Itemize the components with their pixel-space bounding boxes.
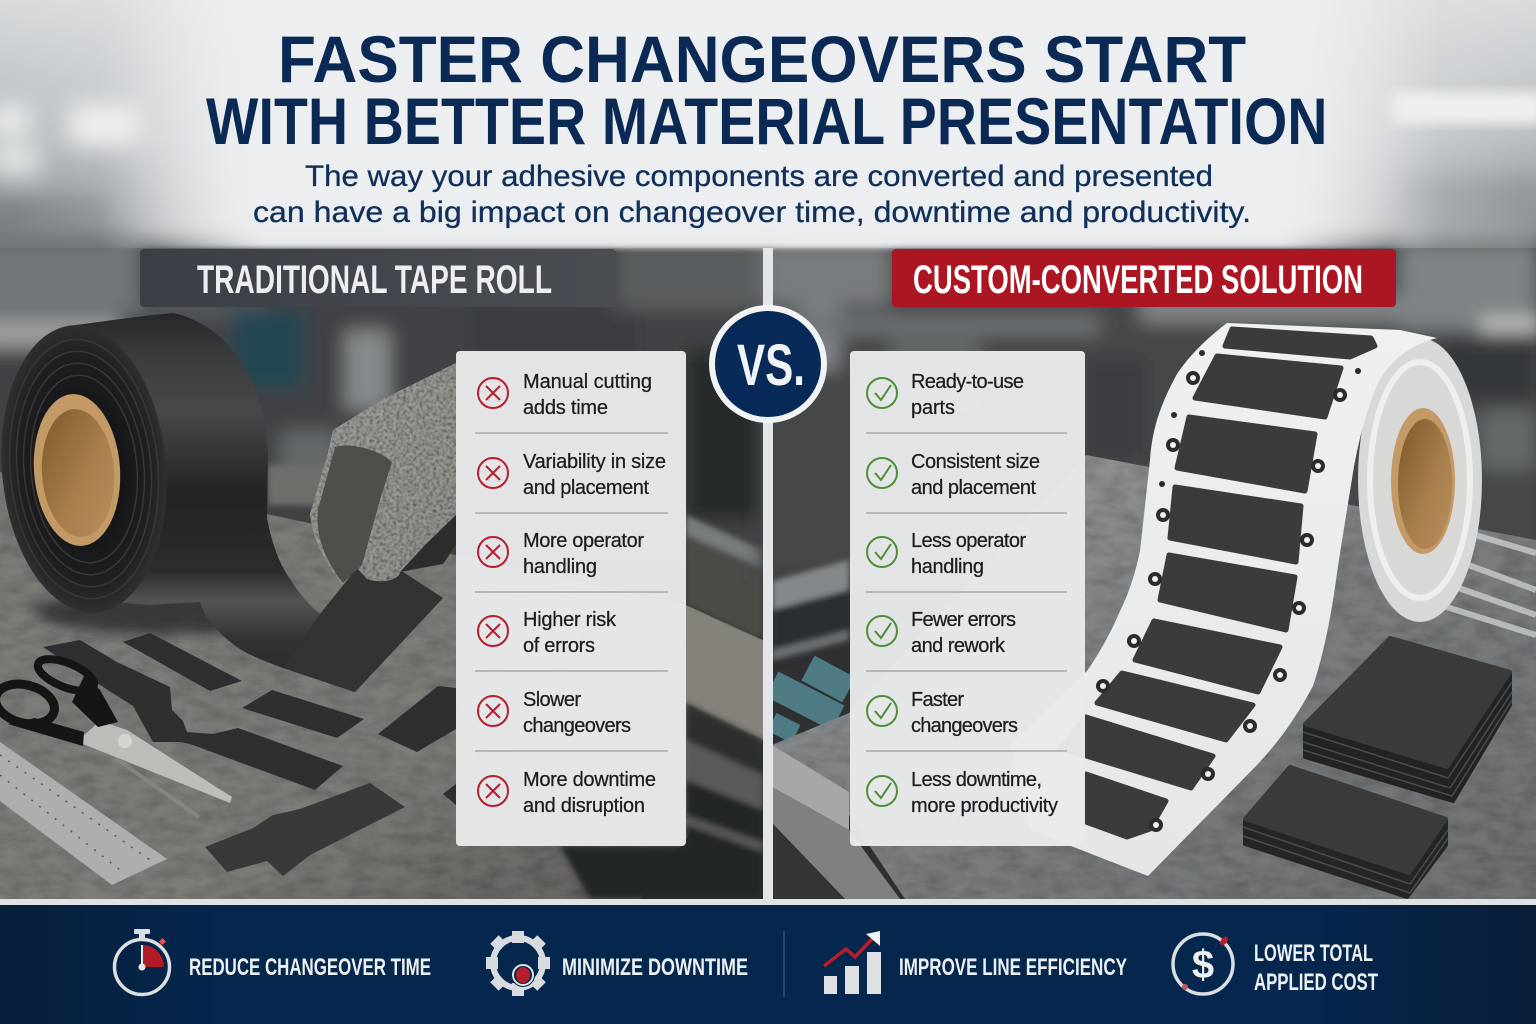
- item: less downtime: more productivity: [911, 795, 1058, 817]
- item: manual cutting: [478, 371, 652, 419]
- icon: rising bar chart: [824, 931, 881, 994]
- icon: dollar coin: $: [1192, 943, 1214, 987]
- factory backdrop right: [760, 240, 1536, 580]
- title: WITH BETTER MATERIAL PRESENTATION: [206, 84, 1327, 158]
- item: slower changeovers: [478, 689, 631, 737]
- item: variability: and placement: [523, 477, 649, 499]
- glove hand: [310, 363, 456, 585]
- item: variability: Variability in size: [523, 451, 666, 473]
- item: consistent size: Consistent size: [911, 451, 1040, 473]
- ruler: [0, 742, 167, 885]
- blue conveyor rollers: [772, 668, 849, 734]
- icon: gear: [486, 931, 550, 996]
- icon: dollar coin: [1173, 934, 1233, 994]
- item: variability: [478, 451, 666, 499]
- subtitle: The way your adhesive components are converted and presented: [305, 160, 1213, 193]
- factory backdrop left: [0, 235, 780, 560]
- scissors: [0, 653, 232, 819]
- item: operator handling: [478, 530, 644, 578]
- label: lower total applied cost: LOWER TOTAL: [1254, 940, 1373, 967]
- background: blurred factory behind header: [0, 0, 1536, 250]
- item: operator handling: handling: [523, 556, 597, 578]
- panel: left photo, traditional tape roll: [0, 235, 780, 900]
- heading: traditional tape roll: [140, 249, 616, 307]
- stacks of die-cut parts: [1243, 638, 1512, 897]
- item: risk of errors: [478, 609, 617, 657]
- item: operator handling: More operator: [523, 530, 644, 552]
- item: fewer errors: Fewer errors: [911, 609, 1016, 631]
- item: more downtime: [478, 769, 656, 817]
- label: lower total applied cost: APPLIED COST: [1254, 969, 1378, 996]
- item: slower changeovers: changeovers: [523, 715, 631, 737]
- item: risk of errors: Higher risk: [523, 609, 617, 631]
- footer band: [0, 899, 1536, 1024]
- item: less handling: [867, 530, 1026, 578]
- item: less downtime: Less downtime,: [911, 769, 1042, 791]
- item: ready-to-use: parts: [911, 397, 955, 419]
- white liner with die-cut parts: [1010, 323, 1437, 876]
- label: lower total applied cost: [1254, 940, 1378, 996]
- item: more downtime: and disruption: [523, 795, 645, 817]
- item: fewer errors: [867, 609, 1016, 657]
- header light wash: [100, 0, 1440, 248]
- title: [206, 22, 1327, 158]
- heading: custom-converted solution: [892, 249, 1396, 307]
- subtitle: can have a big impact on changeover time, downtime and productivity.: [253, 196, 1251, 229]
- table surface left: [0, 472, 763, 899]
- centre divider: [763, 248, 773, 900]
- item: faster changeovers: changeovers: [911, 715, 1018, 737]
- item: ready-to-use: [867, 371, 1024, 419]
- item: faster changeovers: Faster: [911, 689, 964, 711]
- label: improve line efficiency: IMPROVE LINE EFFICIENCY: [899, 954, 1127, 981]
- panel: drawbacks list: [456, 351, 686, 846]
- panel: right photo, custom-converted solution: [760, 240, 1536, 900]
- item: faster changeovers: [867, 689, 1018, 737]
- item: less downtime: [867, 769, 1058, 817]
- subtitle: [253, 160, 1251, 229]
- item: consistent size: and placement: [911, 477, 1036, 499]
- icon: stopwatch: [114, 929, 170, 994]
- title: FASTER CHANGEOVERS START: [278, 22, 1246, 96]
- VS badge: VS.: [737, 333, 805, 398]
- item: manual cutting: adds time: [523, 397, 608, 419]
- VS badge: [709, 305, 827, 423]
- item: fewer errors: and rework: [911, 635, 1006, 657]
- label: minimize downtime: MINIMIZE DOWNTIME: [562, 954, 748, 981]
- heading: traditional tape roll: TRADITIONAL TAPE ROLL: [197, 258, 552, 302]
- label: reduce changeover time: REDUCE CHANGEOVER TIME: [189, 954, 431, 981]
- item: consistent size: [867, 451, 1040, 499]
- white converted roll: [1358, 338, 1482, 622]
- item: ready-to-use: Ready-to-use: [911, 371, 1024, 393]
- item: slower changeovers: Slower: [523, 689, 581, 711]
- item: less handling: handling: [911, 556, 984, 578]
- tape roll, black with cardboard core: [0, 313, 443, 692]
- item: manual cutting: Manual cutting: [523, 371, 652, 393]
- item: more downtime: More downtime: [523, 769, 656, 791]
- panel: benefits list: [850, 351, 1085, 846]
- item: risk of errors: of errors: [523, 635, 595, 657]
- item: less handling: Less operator: [911, 530, 1026, 552]
- cut tape pieces: [43, 633, 456, 876]
- metal table right: [772, 455, 1536, 899]
